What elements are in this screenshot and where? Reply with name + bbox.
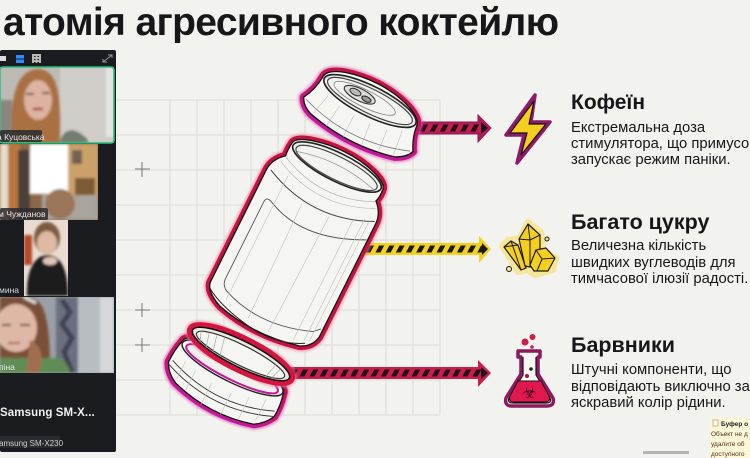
text block: sugar: Величезна кількість	[571, 238, 706, 254]
background grid	[116, 100, 440, 415]
arrow: lid to caffeine	[412, 115, 491, 142]
video tile: child in black	[24, 220, 68, 296]
notification: clipboard: Объект не д	[711, 430, 748, 438]
video tile: woman with red hair	[0, 67, 114, 143]
video tile: child by window	[0, 144, 98, 220]
text block: sugar: Багато цукру	[571, 210, 709, 234]
text block: sugar: швидких вуглеводів для	[571, 255, 736, 271]
scrollbar	[643, 451, 689, 454]
notification: clipboard	[710, 418, 750, 458]
icon: flask with biohazard	[506, 334, 553, 406]
text block: caffeine: запускає режим паніки.	[571, 152, 731, 168]
text block: dyes: відповідають виключно за	[571, 379, 750, 395]
notification: clipboard: Буфер о	[721, 421, 748, 428]
biohazard symbol: ☣	[522, 383, 537, 402]
title: атомія агресивного коктейлю	[3, 1, 559, 44]
arrow: can body to sugar	[362, 236, 491, 263]
text block: dyes	[571, 333, 750, 411]
arrow: base rings to dyes	[288, 360, 491, 387]
participant name, no video: Samsung SM-X...	[0, 407, 95, 419]
upper ring	[184, 316, 298, 392]
notification: clipboard: удалите об	[711, 440, 745, 448]
text block: dyes: яскравий колір рідини.	[571, 395, 726, 411]
text block: caffeine: Кофеїн	[571, 91, 645, 114]
text block: sugar	[571, 210, 748, 287]
can body	[200, 124, 398, 358]
can lid	[296, 57, 433, 168]
active speaker border	[0, 67, 114, 143]
panel: video call participants	[0, 50, 116, 452]
icon: lightning bolt	[506, 95, 550, 163]
name label: amsung SM-X230	[0, 439, 64, 448]
toolbar icons	[0, 54, 112, 63]
video tile: girl	[0, 297, 114, 373]
text block: caffeine: Екстремальна доза	[571, 120, 706, 136]
can illustration: exploded view	[158, 57, 433, 436]
lower ring	[158, 328, 292, 436]
text block: sugar: тимчасової ілюзії радості.	[571, 271, 748, 287]
text block: dyes: Штучні компоненти, що	[571, 362, 732, 378]
notification: clipboard: доступного	[711, 451, 745, 458]
text block: dyes: Барвники	[571, 333, 675, 357]
text block: caffeine	[571, 91, 750, 168]
icon: sugar crystals	[502, 222, 556, 275]
